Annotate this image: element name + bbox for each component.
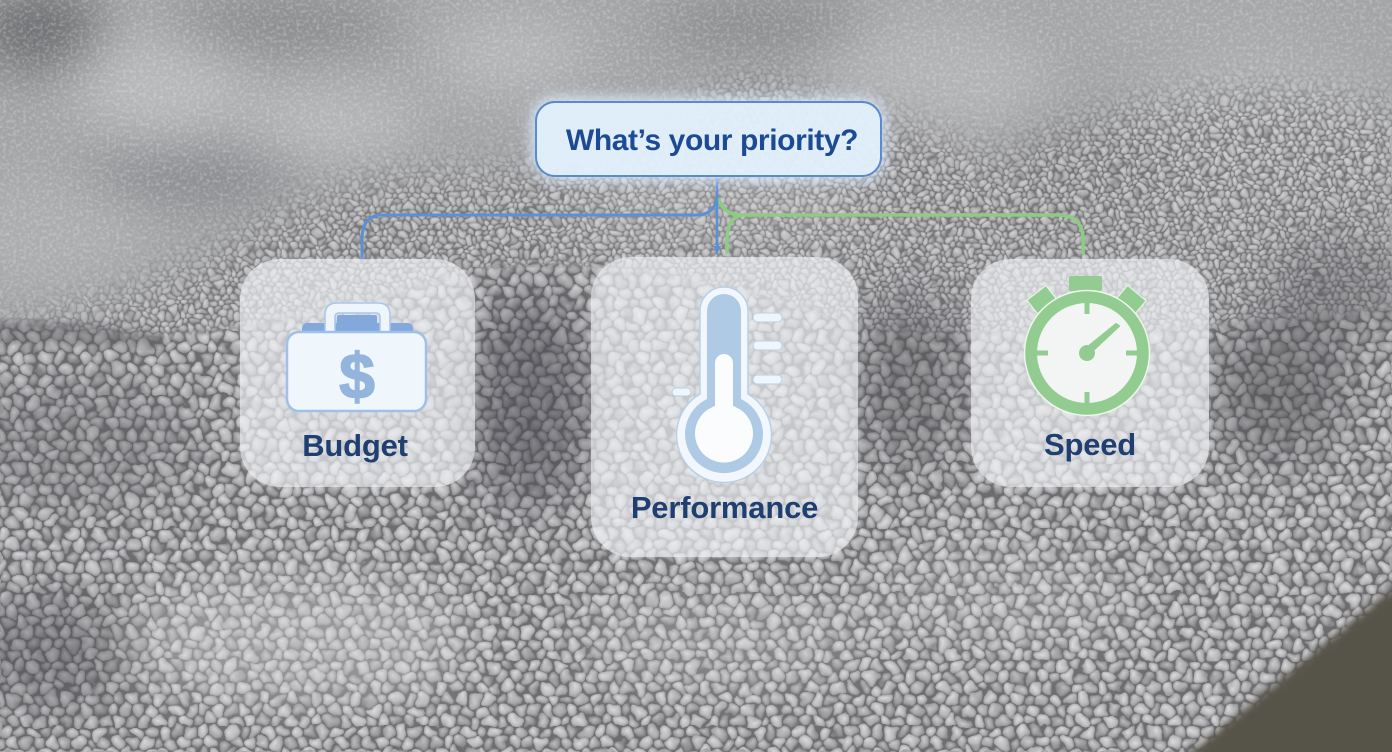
beads: distant smaller layer bbox=[0, 58, 1392, 340]
icon: stopwatch bbox=[1024, 276, 1150, 416]
connector: blue line to Performance bbox=[713, 178, 721, 254]
large scale shading across the beads bbox=[0, 155, 1392, 710]
soft lumps in the blurred upper background bbox=[0, 0, 1380, 295]
connector: green line to Speed bbox=[719, 200, 1083, 253]
icon: thermometer bbox=[672, 286, 782, 484]
label: Speed: Speed bbox=[1044, 427, 1136, 462]
icon: briefcase with dollar sign: $ bbox=[339, 340, 375, 412]
icon: briefcase with dollar sign bbox=[286, 302, 428, 412]
panel: Performance bbox=[591, 257, 858, 557]
heading text: What’s your priority? bbox=[566, 124, 858, 157]
question box: What's your priority? bbox=[535, 101, 882, 177]
label: Performance: Performance bbox=[631, 490, 818, 525]
panel: Budget bbox=[240, 259, 475, 487]
band of shadow at left ridge bbox=[0, 321, 170, 348]
beads: foreground larger layer bbox=[0, 260, 1392, 752]
label: Budget: Budget bbox=[302, 428, 408, 463]
panel: Speed bbox=[971, 259, 1209, 487]
connector: blue line to Budget bbox=[362, 202, 716, 258]
dark corner behind the fabric bbox=[1170, 575, 1392, 752]
